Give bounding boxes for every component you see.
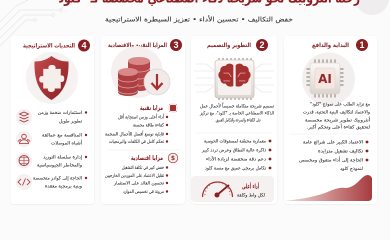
step 4 heading: التحديات الاستراتيجية [23,42,75,50]
step 1 bullet list: الاعتماد الكبير على شرائع عامة [303,140,363,146]
challenge 1: large investment: استثمارات ضخمة وزمن [38,110,82,116]
step 2 badge [256,39,268,51]
step 3 heading: المزايا التقنية والاقتصادية [108,42,167,49]
panel: step 3 technical and economic advantages [101,36,185,204]
step 2 paragraph: تصميم شريحة متكاملة خصيصاً لأحمال عمل [200,103,275,110]
economic advantages list: خفض كبير في تكلفة التشغيل [122,165,164,171]
step 1 badge: 1 [359,40,365,50]
panel: step 1 motivation [284,36,377,204]
panel: step 4 strategic challenges [10,36,94,204]
technical advantages list: كفاءة طاقة محسنة [133,123,165,129]
step 1 bullet list [299,140,368,172]
step 1 paragraph: مع تزايد الطلب على نموذج "كلود" [310,102,370,108]
step 2 bullet list [201,138,271,172]
step 4 badge: 4 [81,41,87,51]
challenge 1: large investment [16,109,87,125]
challenge 1: large investment: تطوير طويل [59,119,83,125]
step 2 paragraph [199,103,275,124]
step 2 paragraph: على الكفاءة والسرعة والتكامل العميق. [215,118,261,124]
challenge 2: competition: المنافسة مع عمالقة [42,133,82,139]
callout: higher performance gauge: أداء أعلى [242,182,259,190]
step 1 heading: البداية والدافع [312,42,349,49]
step 1 badge [356,39,368,51]
step 1 paragraph: أنثروبيك تطوير شريحة مخصصة [305,117,371,124]
background circuit decoration [0,0,389,46]
challenge 4: specialized talent [16,174,87,190]
icon: technical chip [168,103,178,113]
callout: higher performance gauge: لكل واط وكلفة [237,193,265,199]
area chart: rising costs [284,175,372,201]
step 1 paragraph: لتحقيق كفاءة أعلى وتحكم أكبر. [307,124,370,131]
step 1 bullet list: الحاجة إلى أداء متفوق ومخصص [299,157,363,164]
icon: AI chip: AI [318,72,332,86]
step 2 bullet list: معمارية محسّنة لمصفوفات الحوسبة [204,138,266,145]
icon: dollar coin [168,153,178,163]
economic advantages list [105,165,168,195]
step 2 heading: التطوير والتصميم [207,42,251,49]
challenge 4: specialized talent: الحاجة إلى كوادر متخصصة [33,176,82,182]
step 2 bullet list: دعم دقة منخفضة لزيادة الأداء [206,156,266,163]
icon: shield with puzzle piece [26,52,78,104]
technical advantages list [105,114,168,145]
subtitle: خفض التكاليف • تحسين الأداء • تعزيز السيطرة الاستراتيجية [105,14,293,24]
technical advantages list: قابلية توسع أفضل للأحمال الضخمة [105,131,164,138]
challenge 3: supply chain [16,152,87,169]
panel: step 2 development and design [191,36,277,204]
step 4 badge [78,40,90,52]
economic advantages heading: مزايا اقتصادية [131,154,163,162]
icon: AI chip [302,52,355,106]
step 3 badge [170,39,182,51]
step 3 badge: 3 [173,40,179,50]
challenge 2: competition [16,131,87,147]
icon: brain chip with circuit traces [194,58,274,100]
step 1 bullet list: لنموذج كلود [340,166,363,172]
icon: coin stacks with down arrow [111,46,170,98]
step 2 badge: 2 [259,40,265,50]
step 2 bullet list: ذاكرة عالية النطاق وعرض تردد كبير [201,148,266,154]
icon: gauge [202,182,232,198]
step 2 paragraph: الذكاء الاصطناعي الخاصة بـ "كلود"، مع تركيز [199,111,274,117]
icon: dollar coin: $ [171,155,175,162]
step 2 bullet list: تكامل برمجي عميق مع منصة كلود [205,166,267,172]
challenge 4: specialized talent: وبنية برمجية معقدة [45,185,82,190]
challenge 3: supply chain: إدارة سلسلة التوريد [43,155,83,161]
economic advantages list: تقليل الاعتماد على الموردين الخارجيين [105,173,165,179]
technical advantages heading: مزايا تقنية [140,104,163,112]
challenge 3: supply chain: والمخاطر الجيوسياسية [37,163,82,169]
technical advantages list: أداء أعلى وزمن استجابة أقل [118,114,165,121]
callout: higher performance gauge [191,176,274,202]
step 1 paragraph [303,102,371,131]
economic advantages list: مرونة في تخصيص الموارد [123,189,164,195]
step 1 paragraph: والاعتماد لتكاليف البنية التحتية، قدرت [303,110,370,116]
challenge 2: competition: أشباه الموصلات [51,140,83,147]
economic advantages list: تحسين العائد على الاستثمار [113,181,165,187]
step 1 bullet list: تكاليف تشغيل متزايدة [318,149,364,155]
technical advantages list: تحكم كامل في الكلفات والبرمجيات [109,139,165,145]
